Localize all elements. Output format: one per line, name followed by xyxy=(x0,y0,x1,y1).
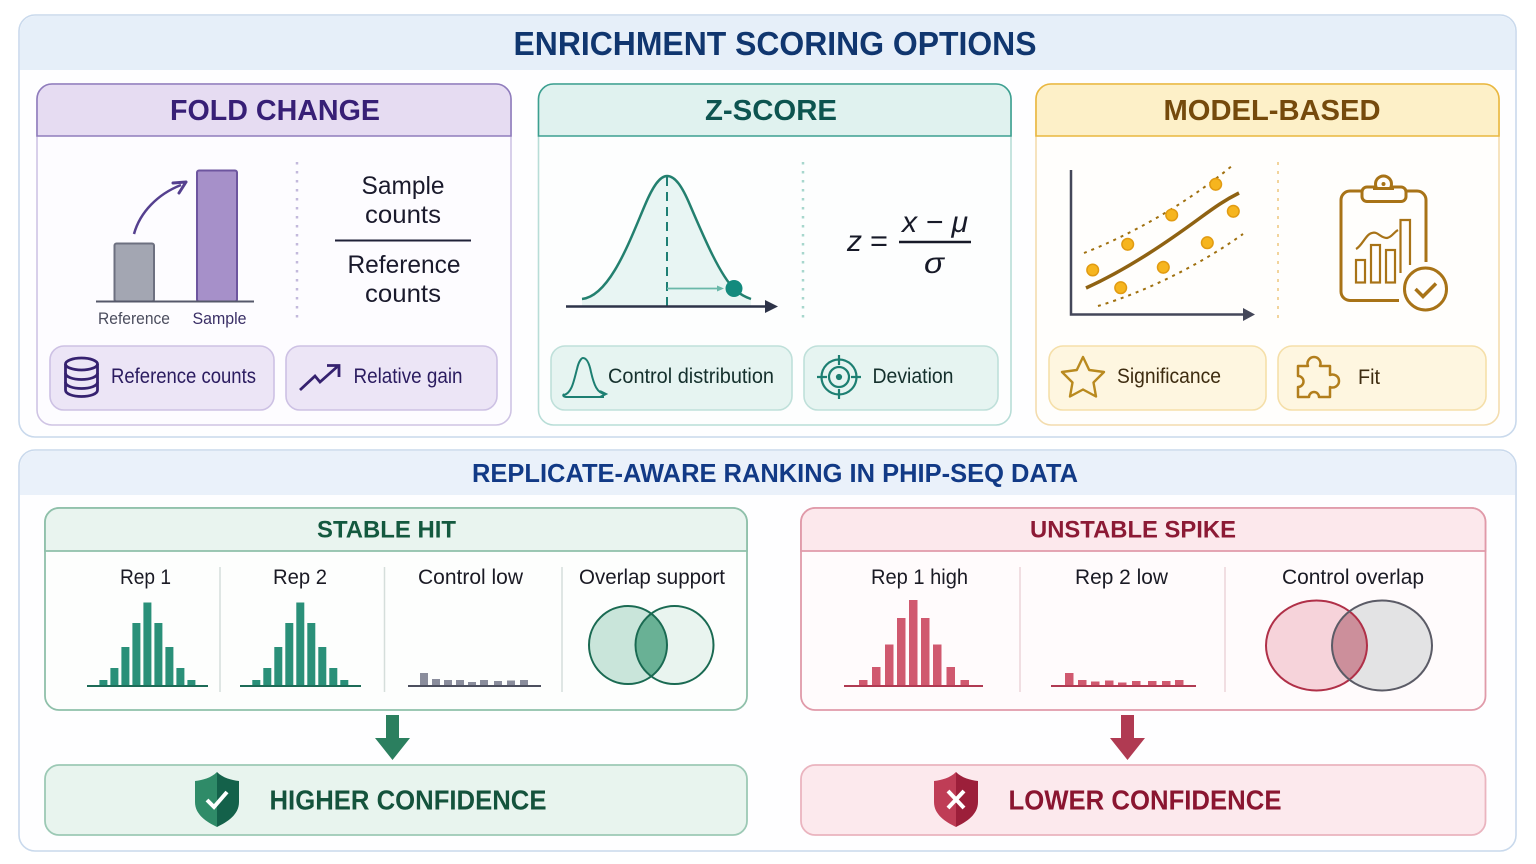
chip: deviation xyxy=(804,346,998,410)
heading: z-score: Z-SCORE xyxy=(705,95,837,127)
column: control low histogram xyxy=(408,566,541,686)
bar chart: reference vs sample xyxy=(96,170,254,328)
column: rep 2 histogram: Rep 2 xyxy=(273,566,327,589)
column: rep 1 high histogram xyxy=(844,566,983,686)
chip: reference counts: Reference counts xyxy=(111,365,256,388)
formula: z equals x minus mu over sigma: z xyxy=(846,225,862,258)
icon: shield with x xyxy=(934,772,978,827)
column: control low histogram: Control low xyxy=(418,566,524,589)
formula: z equals x minus mu over sigma: = xyxy=(870,225,888,258)
icon: rising trend xyxy=(300,366,339,390)
column: rep 1 histogram xyxy=(87,566,208,686)
heading: fold change: FOLD CHANGE xyxy=(170,95,380,127)
callout: higher confidence xyxy=(45,765,747,835)
icon: database xyxy=(66,358,98,396)
panel: stable hit xyxy=(45,508,747,710)
callout: higher confidence: HIGHER CONFIDENCE xyxy=(270,784,546,816)
panel: model-based xyxy=(1036,84,1499,425)
arrow: unstable spike to lower confidence xyxy=(1110,715,1145,760)
heading: unstable spike: UNSTABLE SPIKE xyxy=(1030,516,1236,544)
column: control overlap venn xyxy=(1266,566,1432,690)
formula: fold change ratio: counts xyxy=(365,201,441,229)
heading: model-based: MODEL-BASED xyxy=(1164,95,1380,127)
callout: lower confidence xyxy=(801,765,1486,835)
chip: fit xyxy=(1278,346,1486,410)
icon: shield with check xyxy=(195,772,239,827)
icon: target xyxy=(817,355,861,399)
chip: relative gain xyxy=(286,346,497,410)
panel: enrichment scoring options xyxy=(19,15,1516,437)
formula: fold change ratio: counts xyxy=(365,280,441,308)
icon: puzzle piece xyxy=(1298,357,1339,397)
bar chart: reference vs sample: Sample xyxy=(192,310,246,328)
callout: lower confidence: LOWER CONFIDENCE xyxy=(1008,784,1282,816)
formula: fold change ratio xyxy=(335,172,471,308)
column: rep 2 histogram xyxy=(240,566,361,686)
chart: regression scatter xyxy=(1071,165,1255,321)
panel: unstable spike xyxy=(801,508,1486,710)
title: ENRICHMENT SCORING OPTIONS xyxy=(514,25,1036,62)
panel: replicate-aware ranking xyxy=(19,450,1516,851)
chip: deviation: Deviation xyxy=(872,365,954,388)
panel: fold change xyxy=(37,84,511,425)
column: overlap support venn xyxy=(579,566,725,684)
icon: star xyxy=(1062,357,1104,396)
formula: fold change ratio: Reference xyxy=(348,251,460,279)
chip: fit: Fit xyxy=(1358,366,1380,389)
chip: significance xyxy=(1049,346,1266,410)
heading: replicate-aware ranking: REPLICATE-AWARE RANKING IN PHIP-SEQ DATA xyxy=(472,458,1078,488)
column: overlap support venn: Overlap support xyxy=(579,566,725,589)
chip: significance: Significance xyxy=(1117,365,1221,388)
panel: z-score xyxy=(538,84,1011,425)
chip: control distribution xyxy=(551,346,792,410)
column: control overlap venn: Control overlap xyxy=(1282,566,1424,589)
column: rep 1 histogram: Rep 1 xyxy=(120,566,171,589)
icon: small bell curve xyxy=(563,358,606,397)
heading: stable hit: STABLE HIT xyxy=(317,516,456,544)
icon: clipboard with chart and check xyxy=(1341,176,1446,310)
bar chart: reference vs sample: Reference xyxy=(98,310,170,328)
column: rep 2 low histogram xyxy=(1051,566,1196,686)
chip: relative gain: Relative gain xyxy=(354,365,462,388)
formula: z equals x minus mu over sigma: x − μ xyxy=(900,206,968,239)
column: rep 1 high histogram: Rep 1 high xyxy=(871,566,968,589)
chip: reference counts xyxy=(50,346,274,410)
formula: fold change ratio: Sample xyxy=(362,172,444,200)
chip: control distribution: Control distribution xyxy=(608,365,774,388)
formula: z equals x minus mu over sigma xyxy=(846,206,971,280)
column: rep 2 low histogram: Rep 2 low xyxy=(1075,566,1169,589)
arrow: stable hit to higher confidence xyxy=(375,715,410,760)
formula: z equals x minus mu over sigma: σ xyxy=(924,247,946,280)
chart: control distribution bell curve xyxy=(566,176,778,313)
